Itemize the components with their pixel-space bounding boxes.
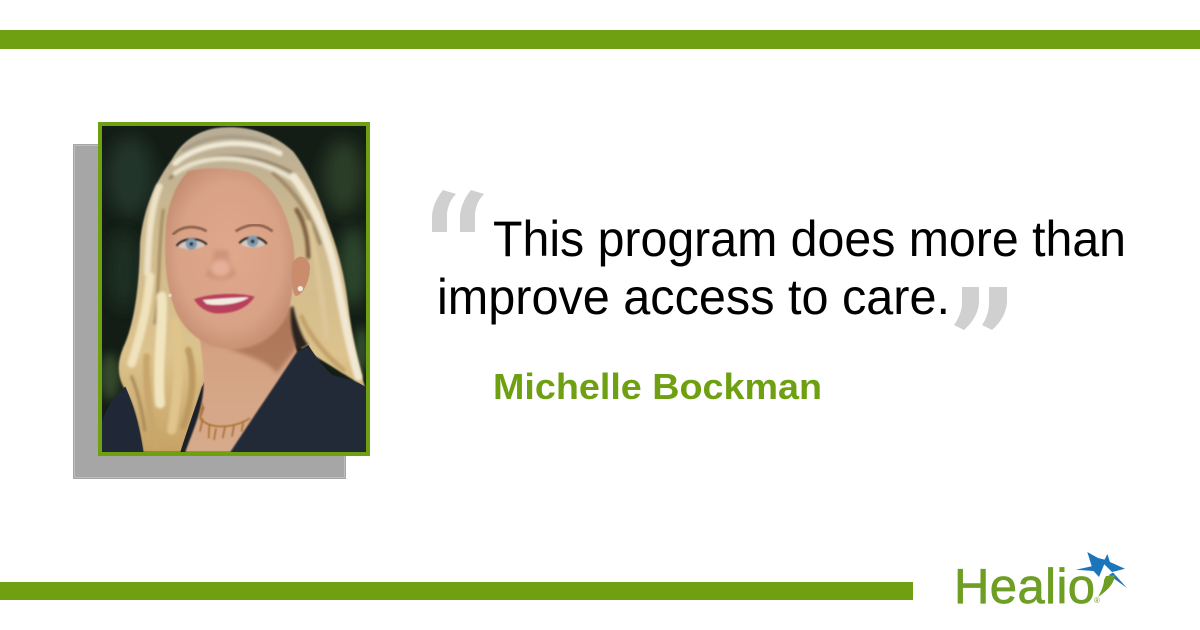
logo star — [1076, 552, 1127, 597]
eyes — [177, 236, 267, 250]
attribution name: Michelle Bockman — [493, 366, 822, 407]
top green bar — [0, 30, 1200, 49]
Healio logo — [954, 552, 1127, 614]
grey offset panel behind portrait — [73, 144, 346, 479]
jacket — [102, 345, 366, 452]
registered mark: ® — [1094, 596, 1100, 605]
necklace — [200, 403, 250, 440]
quote text — [437, 211, 1126, 325]
portrait photo with green frame — [98, 122, 370, 456]
hair back — [119, 127, 365, 452]
nose — [205, 250, 237, 280]
dark hair shadow beside neck — [291, 307, 308, 351]
icon: opening quotation mark — [432, 190, 484, 232]
hair highlights and strands — [132, 137, 358, 447]
face — [165, 168, 295, 348]
eyebrows — [173, 225, 272, 234]
background foliage — [100, 126, 367, 452]
bottom green bar — [0, 582, 913, 600]
quote text: This program does more than — [493, 211, 1126, 267]
ear with earring — [168, 257, 310, 297]
mouth — [194, 294, 255, 313]
neck — [185, 307, 297, 452]
neck shadow — [207, 312, 295, 373]
logo wordmark: Healio — [954, 560, 1095, 614]
quote text: improve access to care. — [437, 269, 950, 325]
icon: closing quotation mark — [954, 287, 1007, 330]
